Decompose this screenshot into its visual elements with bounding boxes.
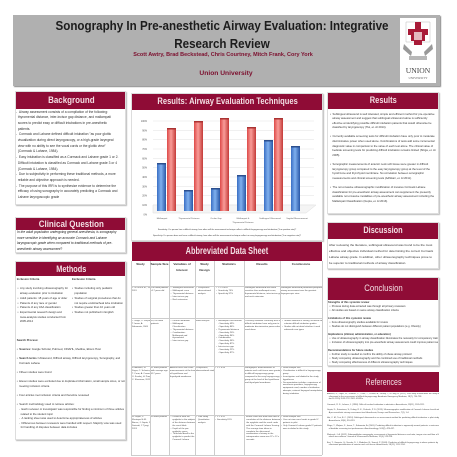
bar chart: sensitivity and specificity: 70% — [142, 148, 148, 151]
table row 3: Zeger, C. Schmier, — [132, 370, 150, 372]
panel: methods — [15, 261, 126, 440]
table row 4: Dwivedi, Y. Tyagi, — [132, 425, 149, 427]
table row 4: epiglottis to predict the — [172, 436, 194, 438]
results text — [330, 112, 436, 203]
background text: Difficult intubation is classified as Cormack and Lahane grade 3 or 4 — [18, 161, 117, 165]
inclusion criteria: 2005-2014 — [20, 320, 33, 323]
bar chart: sensitivity and specificity: 20% — [142, 195, 148, 198]
table row 4: • Can not view vocal cords in grade IV — [281, 419, 318, 421]
references list: Ezri, T., Gewurtz, G., Sessler, D. I., Medalion, B., Szmuk, P. (2003). Prediction of difficult laryngoscopy in obese patients by — [327, 442, 438, 444]
background text: (Cormack & Lahane, 1984). — [18, 167, 58, 171]
background text: scores to predict easy or difficult intubations in pre-anesthetic — [18, 121, 107, 125]
search process: • Sources: Google Scholar, Pubmed, CINAHL, Medline, Ebsco Host — [17, 348, 101, 351]
search process: meeting inclusion criteria — [19, 385, 49, 388]
logo: Union University crest — [400, 18, 436, 83]
results text: • Sublingual ultrasound is well tolerated, simple and efficient method for pre-operative — [330, 112, 435, 116]
table row 1: sensitive than mallampati score, — [245, 290, 276, 292]
table column headings: Conclusions — [292, 262, 310, 266]
background text: - Cormack and Lahane defined difficult intubation "as poor glottic — [16, 132, 111, 136]
results text: • The non-invasive ultrasonographic modification of invasive Cormack Lahane — [330, 186, 425, 189]
table row 3: compared to the easy laryngoscopy — [245, 376, 280, 378]
bar chart: sensitivity and specificity: 10% — [142, 204, 148, 207]
table row 1: airway assessment was the greatest — [281, 290, 316, 292]
results text: Mallampati Classification (Gupta, et. Al 2013). — [332, 200, 388, 203]
discussion text: After reviewing the literature, sublingual ultrasound was found to be the most — [329, 243, 432, 247]
results text: airway assessment and suggest that sublingual ultrasound alone is sufficiently — [332, 117, 427, 120]
conclusion text: • All studies are based on same airway classification criteria — [329, 308, 399, 312]
table row 2: • Thyromental distance — [216, 329, 239, 331]
background text: - Easy intubation is classified as a Cormack and Lahane grade 1 or 2. — [16, 155, 118, 159]
panel: discussion — [327, 222, 439, 269]
heading: results airway evaluation techniques: Results: Airway Evaluation Techniques — [157, 96, 298, 106]
heading: background — [15, 91, 127, 109]
table row 3: hypotheses — [283, 379, 294, 381]
background text: patients. — [18, 127, 30, 131]
table row 2: - Specificity 94% — [218, 335, 234, 337]
table column headings: Design — [199, 268, 210, 272]
references list: Hui, C. M., Tsui, B. C. (2014). Sublingual ultrasound as an assessment method for predicting difficult intubation: a pilot study. — [327, 417, 439, 419]
search process: • Search methodology used to retrieve articles: — [17, 403, 74, 406]
inclusion criteria: • Patients of any ASA classification — [18, 306, 61, 309]
panel: abbreviated data sheet — [131, 242, 323, 457]
table column headings: Statistics — [222, 262, 236, 266]
heading: discussion — [327, 222, 440, 239]
search process: • Search terms: Ultrasound, Difficult airway, Difficult laryngoscopy, Sonography, and — [17, 357, 120, 360]
inclusion criteria: • Patients of any race or gender — [18, 302, 57, 305]
panel: results chart — [131, 93, 323, 241]
table row 2: thyromental — [172, 337, 184, 339]
table column headings: Results — [256, 262, 268, 266]
table row 2: - Sensitivity 36% — [218, 340, 234, 342]
conclusion text: • Few ultrasonography studies available for review — [329, 320, 388, 324]
results text: bedside screening tests for predicting difficult intubation remains limited (Shiga, et. Al. — [332, 149, 436, 152]
table row 2: Sakamoto, 2005 — [132, 326, 148, 328]
table row 4: • Distance from the — [171, 416, 190, 418]
table row 2: - Sensitivity 22% — [218, 349, 234, 351]
table row 2: Classification — [172, 326, 185, 328]
search process: Search Process: — [17, 339, 38, 342]
exclusion criteria — [72, 278, 123, 314]
discussion text — [329, 243, 434, 265]
bar chart: sensitivity and specificity: 50% — [142, 167, 148, 170]
bar chart: sensitivity and specificity: Ocular Gap — [210, 217, 222, 220]
background text: - Due to subjectivity in performing these traditional methods, a more — [16, 172, 116, 176]
heading: discussion: Discussion — [364, 225, 403, 235]
conclusion text: Recommendations for future studies — [328, 348, 373, 352]
sensitivity and specificity definitions: Sensitivity: If a person has a difficult airway, how often will the assessment technique reflect a difficult laryngoscopy and intubation (True positive rate)? — [158, 229, 296, 231]
results text: discriminative power when used alone. Combinations of tests add some incremental — [332, 140, 435, 143]
table row 4: A new scale was built from ratio of — [246, 416, 279, 418]
table column headings: Interest — [176, 268, 188, 272]
table row 3: attempts, external laryngeal manipulation — [283, 390, 322, 392]
clinical question text: In the adult population undergoing general anesthesia, is sonography — [17, 230, 117, 234]
background text: - Airway assessment consists of a compilation of the following: — [16, 110, 108, 114]
discussion text: Lahane airway grade. In addition, other ultrasonography techniques prove to — [329, 255, 432, 259]
table row 1: • Thyromental distance — [171, 293, 194, 295]
results text: measurements and clinical screening tests (Adhikari, et. Al 2011). — [332, 177, 412, 180]
table row 1: observational — [198, 290, 211, 292]
table row 4: 2013 — [132, 428, 137, 430]
table row 1: • P = 0.003 — [216, 287, 228, 289]
heading: conclusion — [327, 277, 440, 300]
table row 1: >17 years old — [151, 290, 164, 292]
background text: efficacy of using sonography in accurately predicting a Cormack and — [18, 189, 117, 193]
exclusion criteria: • Studies of surgical procedures that do — [72, 297, 121, 300]
university: Union University — [199, 70, 253, 77]
bar chart: sensitivity and specificity: Thyromental Distance — [178, 217, 200, 220]
table column headings: Study — [200, 262, 209, 266]
bar chart: sensitivity and specificity: 30% — [142, 185, 148, 188]
table row 4: analysis — [198, 422, 206, 424]
results text: classified by laryngoscopy (Hui, et. Al 2014). — [332, 126, 386, 129]
references list: Wojtczak, J. A. (2012). Submandibular sonography: assessment of hyomental distances and ratio, tongue size and floor of the — [327, 434, 439, 436]
table row 3: with average age — [151, 370, 168, 372]
table row 2: • Inter-incisor gap — [171, 340, 188, 342]
exclusion criteria: • Studies greater than 10 years old — [72, 306, 115, 309]
table row 1: analysis — [198, 293, 206, 295]
conclusion text: • Further study is needed to confirm the ability of obese airway protocol — [329, 352, 412, 356]
exclusion criteria: • Studies not published in English — [72, 311, 113, 314]
heading: references: References — [365, 377, 401, 387]
table row 3: of hyoid bone and — [170, 373, 187, 375]
table column headings: Sample Size — [150, 262, 169, 266]
references list: ultrasound quantification of anterior neck soft tissue. Anaesthesia, 58(11), 1111-1114. — [329, 444, 405, 446]
table row 4: epiglottic space — [172, 431, 188, 433]
table row 3: • Small sample size — [281, 367, 301, 369]
table row 2 — [132, 320, 322, 354]
table row 3: in difficult laryngoscopy group — [245, 373, 274, 375]
panel: conclusion — [327, 277, 439, 366]
table row 3: group at the level of the hyoid bone — [245, 379, 279, 381]
title — [56, 18, 388, 51]
results text: • Sonographic measurements of anterior neck soft tissue were greater in difficult — [330, 163, 428, 166]
table row 3: anterior neck soft tissue were greater — [245, 370, 280, 372]
search process: • Four articles met inclusion criteria and therefore reviewed — [17, 394, 89, 397]
table row 3: and thyrohyoid membrane — [245, 382, 270, 384]
conclusion text: Limitations of this systemic review — [328, 316, 371, 320]
header banner — [13, 15, 440, 86]
table row 3: S. Adhikari, W. — [132, 367, 146, 369]
table row 1: • Sublingual ultrasound — [171, 287, 194, 289]
results text: laryngoscopy group compared to the easy laryngoscopy group at the level of the — [332, 168, 430, 171]
table row 2: T. Inoue, A. — [132, 323, 143, 325]
table row 4: with the Cormack Lahane Scoring. — [246, 425, 280, 427]
table row 1: • Specificity 97% — [216, 293, 233, 295]
table row 4: intraoperative room was 37 ± 12 s — [246, 436, 279, 438]
background text — [16, 110, 118, 199]
table column headings — [136, 262, 310, 272]
table row 1: and neck extension — [245, 296, 264, 298]
conclusion text: Strengths of this systemic review — [328, 300, 369, 304]
bar chart: sensitivity and specificity: 60% — [142, 157, 148, 160]
table row 2: criterion difficult intubation grades — [284, 323, 317, 325]
results text: diagnostic value in comparison to the value of each test alone. The clinical value of — [332, 145, 433, 148]
table row 3: ≥17 years — [151, 373, 161, 375]
search process: Cormack Lahane — [19, 362, 40, 365]
bar chart: sensitivity and specificity: 100% — [141, 120, 148, 123]
title: Sonography In Pre-anesthetic Airway Evaluation: Integrative — [56, 18, 388, 33]
logo: Union University crest: UNIVERSITY — [408, 76, 428, 80]
table row 3: Anterior neck soft tissue — [170, 367, 193, 369]
inclusion criteria: meta-analysis studies conducted from — [20, 316, 66, 319]
references list — [327, 393, 439, 446]
panel: clinical question — [15, 217, 126, 253]
heading: methods — [15, 261, 127, 276]
clinical question text — [17, 230, 117, 251]
table row 4: • Pilot study — [196, 416, 208, 418]
clinical question text: more sensitive in identifying an accurate Cormack and Lahane — [17, 236, 107, 240]
conclusion text — [328, 300, 438, 364]
inclusion criteria: Inclusion Criteria — [17, 278, 39, 281]
table row 1 — [132, 287, 322, 301]
table row 4: • Only Cormack Lahane grade IV patients — [281, 425, 322, 427]
background text: Lahane laryngoscopic grade — [18, 195, 59, 199]
background text: thyromental distance, inter-incisor gap distance, and mallampati — [18, 115, 111, 119]
table row 2: 50,760 adult — [151, 320, 163, 322]
bar chart: sensitivity and specificity: Sublingual Ultrasound — [259, 217, 281, 220]
background text: (Cormack & Lahane, 1984). — [18, 149, 58, 153]
table row 4: examination of airway in the — [246, 433, 273, 435]
table row 4: Quantitative — [198, 419, 210, 421]
table row 2: • Inter-incisor gap — [216, 346, 234, 348]
table row 4: • Sensitivity 81% — [215, 419, 232, 421]
table row 4: patients in pilot — [283, 422, 297, 424]
search process: - A ranking sheet was used to determine appropriateness of articles — [19, 417, 102, 420]
references list: Gupta, D., Srivastava, S., Dubey, R. K., Prakash, P. S. (2013). Ultrasonographic modification of Cormack Lahane classification: — [327, 409, 439, 411]
table row 3: • Documentation includes: experience of — [281, 382, 321, 384]
heading: conclusion: Conclusion — [364, 283, 403, 294]
results text: • Currently available screening tests for difficult intubation have only poor to moderate — [330, 135, 435, 138]
table row 3: equipment used, number of intubation — [283, 387, 320, 389]
table row 3: during intubation — [283, 393, 299, 395]
heading: methods: Methods — [56, 263, 86, 274]
table row 2: patients — [151, 323, 159, 325]
authors: Scott Awtry, Brad Beckstead, Chris Courtney, Mitch Frank, Cory York — [133, 52, 313, 58]
table row 4: 50 adult patients — [151, 416, 167, 418]
table row 3: Sonographic measurements of — [245, 367, 275, 369]
sensitivity and specificity definitions — [153, 228, 301, 237]
table row 1: Sublingual ultrasound was more — [245, 287, 276, 289]
clinical question text: anesthetic airway assessment? — [17, 246, 62, 250]
table row 2: - Sensitivity 20% — [218, 332, 234, 334]
bar chart: sensitivity and specificity: Mallampati — [157, 217, 168, 220]
heading: results — [327, 92, 440, 109]
bar chart: sensitivity and specificity: 40% — [142, 176, 148, 179]
table row 2: difficult intubation have only poor to — [245, 323, 279, 325]
panel: background — [15, 91, 126, 205]
results text: effective at identifying possible difficult intubation patients that would otherwise be — [332, 122, 432, 125]
table row 2: Mallampati and — [172, 335, 187, 337]
heading: results: Results — [370, 95, 397, 105]
table row 3: group — [283, 373, 288, 375]
table row 4: the vocal folds — [172, 425, 186, 427]
table row 1: laryngoscopic view — [281, 293, 299, 295]
table row 2: • Combination: — [171, 332, 185, 334]
table row 2: unbiased case types — [284, 329, 304, 331]
bar chart: sensitivity and specificity: 80% — [142, 139, 148, 142]
table row 1: • Inter-incisor gap — [171, 296, 188, 298]
table row 4: were included in this study — [283, 428, 308, 430]
table row 2: Meta-analysis — [196, 320, 210, 322]
table row 2: used alone — [245, 329, 256, 331]
table row 4: • P < 0.01 — [215, 416, 225, 418]
heading: clinical question — [15, 217, 127, 230]
table row 2: • Combination: — [216, 337, 231, 339]
inclusion criteria: • Adult patients: 18 years of age or older — [18, 297, 67, 300]
search process — [16, 339, 125, 429]
red bars — [167, 119, 283, 211]
references list: A pre-anesthetic airway assessment tool. Anesthesia, Essays and Researches, 7(1), 1-4. — [329, 412, 409, 414]
inclusion criteria: • Any study involving ultrasonography for — [18, 287, 68, 290]
clinical question text: laryngoscopic grade when compared to traditional methods of pre- — [17, 241, 112, 245]
references list: Anaesthesia, 69(4), 314-319. — [329, 420, 355, 422]
table row 4: Khetarpal & M. — [132, 419, 146, 421]
results text: hyoid bone and thyrohyoid membrane. No correlation between sonographic — [332, 172, 424, 175]
table row 4: seconds — [246, 439, 254, 441]
table row 2: • Mallampati — [171, 323, 183, 325]
table row 1: • Neck extension — [171, 299, 188, 301]
table row 3: • Investigators not blinded to the study — [281, 376, 319, 378]
table row 4: • Threshold dwell to the — [171, 433, 194, 435]
conclusion text: • Process during data extracted was through all primary reviewers — [329, 304, 406, 308]
results text: classification for pre-anesthetic airway assessment can supplement the presently — [332, 191, 431, 194]
table row 4: the epiglottis and the vocal cords — [246, 422, 278, 424]
table row 2: • Mallampati classification — [216, 320, 242, 322]
references list: ultrasound in the assessment of difficult laryngoscopy. Academic Emergency Medicine, 18(7), 754-758. — [329, 396, 422, 398]
exclusion criteria: Exclusion Criteria — [72, 278, 95, 281]
bar chart: sensitivity and specificity: Mallampati & — [237, 217, 250, 220]
conclusion text: • Study comparing effectiveness of different ultrasonography techniques — [329, 360, 413, 364]
table row 1: • Sensitivity 75% — [216, 290, 233, 292]
search process: - Each reviewer or investigator was responsible for finding a minimum of three articles — [19, 408, 124, 411]
bar chart: sensitivity and specificity: 90% — [142, 129, 148, 132]
background text: view with no ability to see the vocal cords or the glottic view" — [18, 144, 106, 148]
references list: of bedside screening test performance. Anesthesiology, 103(2), 429-437. — [329, 428, 395, 430]
exclusion criteria: not require endotracheal tube intubation — [74, 302, 123, 305]
table row 2: • Studies did not detail whether it used — [282, 326, 320, 328]
table row 2: - Specificity 87% — [218, 343, 234, 345]
table row 4: complete the ultrasound — [246, 431, 270, 433]
heading: abbreviated data sheet: Abbreviated Data Sheet — [186, 245, 268, 257]
panel: references — [327, 372, 439, 457]
table row 2: • Thyromental distance — [171, 329, 194, 331]
exclusion criteria: • Studies including only pediatric — [72, 287, 112, 290]
references list: Cormack, R. S., Lehane, J. (1984). Difficult tracheal intubation in obstetrics. Anaesthesia, 39(11), 1105-1111. — [327, 404, 425, 406]
background text: visualization during direct laryngoscopy, or a high-grade laryngeal — [18, 138, 113, 142]
table row 3: 51 adult patients — [151, 367, 167, 369]
heading: background: Background — [48, 94, 94, 105]
table row 3: • P < 0.05 — [215, 367, 225, 369]
table row 2: - Sensitivity 49% — [218, 323, 234, 325]
heading: results airway evaluation techniques — [131, 93, 324, 110]
table row 3: thyrohyoid membrane — [170, 376, 191, 378]
bar chart: sensitivity and specificity: 0% — [144, 213, 148, 216]
table row 3: • Visualization is difficult in laryngoscopy — [281, 370, 321, 372]
bar chart: sensitivity and specificity — [141, 118, 316, 224]
inclusion criteria: airway evaluation prior to intubation — [20, 292, 63, 295]
table row 4: • Depth of the pre- — [171, 428, 189, 430]
table column headings: Variables of — [173, 262, 191, 266]
table row 3: measurements at the level — [170, 370, 195, 372]
conclusion text: • Studies do not distinguish between different patient populations (e.g. Obesity) — [329, 324, 421, 328]
table row 3 — [132, 367, 322, 395]
inclusion criteria — [16, 278, 68, 323]
table row 2: moderate discriminative power when — [245, 326, 280, 328]
references list: doi:10.1111/j.1553-2712.2011.01099.x — [329, 398, 363, 400]
discussion text: effective and objective individual method for determining the correct Cormack — [329, 249, 433, 253]
table row 3: Prospective, — [196, 367, 208, 369]
table row 4: • Small sample size — [281, 416, 301, 418]
inclusion criteria: • Experimental research design and — [18, 311, 62, 314]
table row 3: C. Shostrom, 2011 — [132, 379, 150, 381]
search process: • Fifteen studies were found — [17, 371, 52, 374]
table row 3: anesthesia providers, laryngoscopy — [283, 384, 317, 386]
bar chart: sensitivity and specificity: Thyromental Distance — [232, 221, 254, 224]
logo: Union University crest: UNION — [406, 66, 431, 75]
table row 1: • Prospective — [196, 287, 209, 289]
search process: - Differences between reviewers were handled with respect. Majority vote was used — [19, 422, 121, 425]
table row 2: - Specificity 86% — [218, 326, 234, 328]
table row 2: • Difficult intubation — [171, 320, 190, 322]
search process: for handling of disputes between data includes — [21, 426, 77, 429]
references list: mouth musculature. Journal of Ultrasound in Medicine, 31(4), 523-528. — [329, 436, 393, 438]
panel: results summary — [327, 92, 439, 214]
background text: reliable and objective approach is needed. — [18, 178, 80, 182]
sensitivity and specificity definitions: Specificity: If a person does not have a difficult airway, how often will the assessment technique reflect an easy laryngoscopy and intubation (True negative rate)? — [153, 235, 301, 237]
results text: available non-invasive modalities of pre-anesthetic airway assessment including the — [332, 195, 434, 198]
search process: related to the student topic — [21, 412, 53, 416]
conclusion text: Implications (clinical, administration, or education) — [328, 332, 391, 336]
table row 4 — [132, 416, 322, 441]
table row 4: Cormack Lahane — [172, 439, 189, 441]
table column headings: Study — [136, 262, 145, 266]
table row 1: • Mallampati score — [171, 290, 189, 292]
table row 4: N. Gupta, P. — [132, 416, 144, 418]
table row 1: 100 adult patients — [151, 287, 168, 289]
blue bars — [157, 141, 300, 211]
heading: references — [327, 372, 439, 392]
table row 4: The average time taken to — [246, 428, 272, 430]
conclusion text: • Study comparing ultrasonography and the combined use of traditional methods — [329, 356, 422, 360]
bar chart: sensitivity and specificity: Sagittal Measurement — [286, 217, 308, 220]
table row 4: of the distance between — [172, 422, 195, 424]
heading: clinical question: Clinical Question — [38, 218, 104, 229]
table row 4: correlation of the distance between — [246, 419, 280, 421]
search process: • Eleven studies were excluded due to duplicated information, small sample sizes, or not — [17, 380, 125, 383]
table row 1: 2011 — [132, 290, 137, 292]
title: Research Review — [174, 36, 270, 51]
exclusion criteria: population — [74, 292, 87, 295]
table row 2: - Specificity 97% — [218, 352, 234, 354]
results text: 2005). — [332, 154, 340, 157]
heading: abbreviated data sheet — [132, 242, 322, 261]
discussion text: be superior to traditional methods of airway classification. — [329, 261, 406, 265]
background text: - The purpose of this IRR is to synthesize evidence to determine the — [16, 184, 116, 188]
